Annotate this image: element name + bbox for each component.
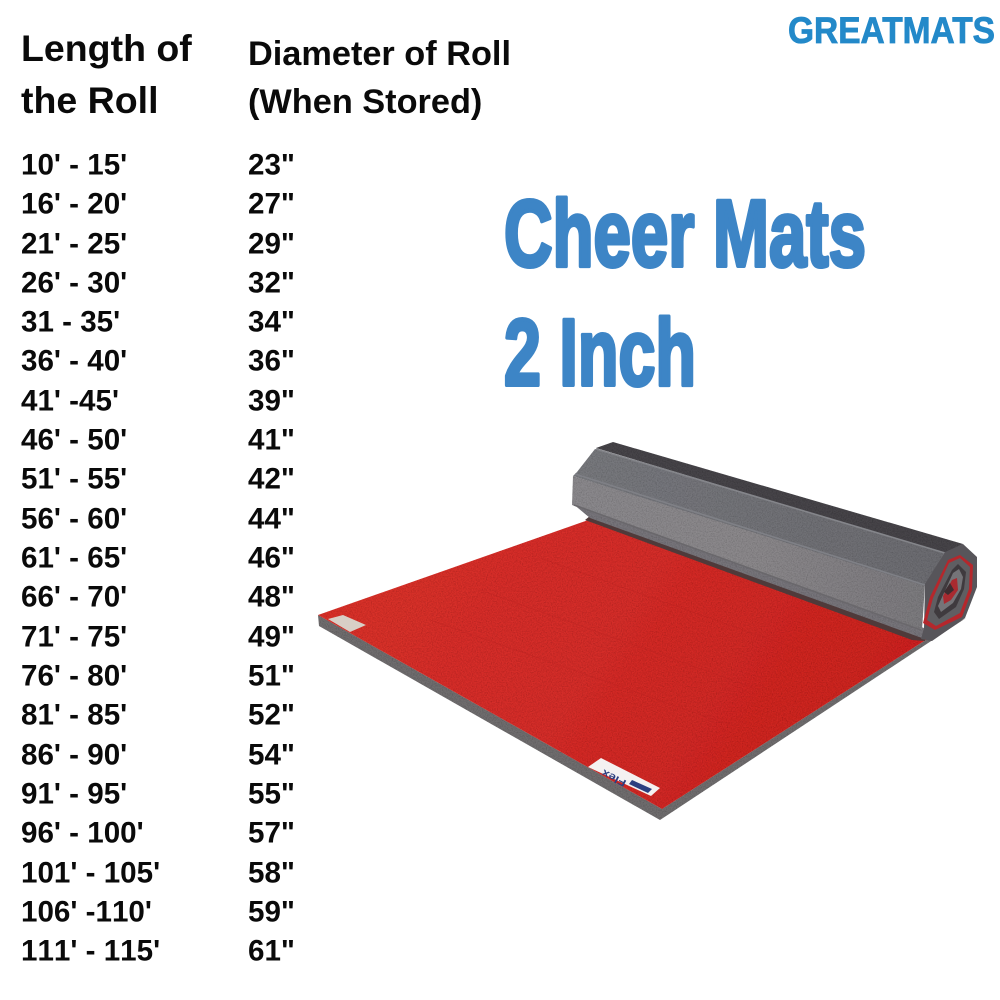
column: roll lengths: 66' - 70' <box>21 581 127 614</box>
band groove lines <box>574 449 945 630</box>
column: roll diameters: 44" <box>248 503 295 536</box>
heading: length of the roll: the Roll <box>21 79 158 121</box>
roll dark top band <box>596 442 963 553</box>
heading: diameter of roll: (When Stored) <box>248 83 482 121</box>
roll light band <box>572 476 925 630</box>
column: roll diameters: 32" <box>248 267 295 300</box>
column: roll diameters: 49" <box>248 621 295 654</box>
roll middle band <box>573 449 945 586</box>
column: roll lengths: 81' - 85' <box>21 699 127 732</box>
column: roll diameters: 46" <box>248 542 295 575</box>
column: roll diameters: 29" <box>248 228 295 261</box>
column: roll lengths: 21' - 25' <box>21 228 127 261</box>
column: roll diameters <box>248 149 295 968</box>
column: roll diameters: 55" <box>248 778 295 811</box>
column: roll diameters: 34" <box>248 306 295 339</box>
column: roll lengths: 101' - 105' <box>21 857 160 890</box>
column: roll diameters: 59" <box>248 896 295 929</box>
column: roll diameters: 23" <box>248 149 295 182</box>
column: roll diameters: 51" <box>248 660 295 693</box>
column: roll lengths: 51' - 55' <box>21 463 127 496</box>
column: roll diameters: 48" <box>248 581 295 614</box>
column: roll lengths: 41' -45' <box>21 385 119 418</box>
column: roll lengths: 46' - 50' <box>21 424 127 457</box>
product photo: rolled red cheer mat <box>318 442 977 820</box>
roll body <box>572 442 963 638</box>
column: roll lengths: 26' - 30' <box>21 267 127 300</box>
column: roll lengths: 16' - 20' <box>21 188 127 221</box>
column: roll diameters: 57" <box>248 817 295 850</box>
heading: length of the roll <box>21 27 192 121</box>
column: roll lengths: 56' - 60' <box>21 503 127 536</box>
column: roll diameters: 52" <box>248 699 295 732</box>
heading: diameter of roll: Diameter of Roll <box>248 35 511 73</box>
column: roll diameters: 39" <box>248 385 295 418</box>
column: roll lengths: 111' - 115' <box>21 935 160 968</box>
column: roll lengths: 76' - 80' <box>21 660 127 693</box>
column: roll lengths: 96' - 100' <box>21 817 144 850</box>
label: corner tag <box>328 615 366 632</box>
column: roll diameters: 42" <box>248 463 295 496</box>
column: roll lengths: 31 - 35' <box>21 306 120 339</box>
label: flex logo tag <box>588 758 660 796</box>
roll shadow on mat <box>585 516 925 641</box>
column: roll lengths: 86' - 90' <box>21 739 127 772</box>
title: Cheer Mats 2 Inch: 2 Inch <box>504 300 696 406</box>
column: roll diameters: 27" <box>248 188 295 221</box>
column: roll lengths: 10' - 15' <box>21 149 127 182</box>
mat red surface <box>318 518 935 809</box>
column: roll diameters: 36" <box>248 345 295 378</box>
roll bottom band <box>572 503 924 638</box>
column: roll lengths: 61' - 65' <box>21 542 127 575</box>
column: roll diameters: 41" <box>248 424 295 457</box>
mat foam edge <box>318 615 966 820</box>
title: Cheer Mats 2 Inch <box>504 181 866 406</box>
column: roll lengths: 36' - 40' <box>21 345 127 378</box>
heading: diameter of roll <box>248 35 511 121</box>
roll end: spiral of foam and carpet <box>921 544 977 641</box>
column: roll lengths: 91' - 95' <box>21 778 127 811</box>
column: roll diameters: 54" <box>248 739 295 772</box>
column: roll lengths <box>21 149 160 968</box>
column: roll lengths: 71' - 75' <box>21 621 127 654</box>
label: flex logo tag: Flex <box>600 766 628 788</box>
column: roll diameters: 61" <box>248 935 295 968</box>
mat seam lines <box>430 558 800 725</box>
column: roll lengths: 106' -110' <box>21 896 152 929</box>
column: roll diameters: 58" <box>248 857 295 890</box>
heading: length of the roll: Length of <box>21 27 192 69</box>
